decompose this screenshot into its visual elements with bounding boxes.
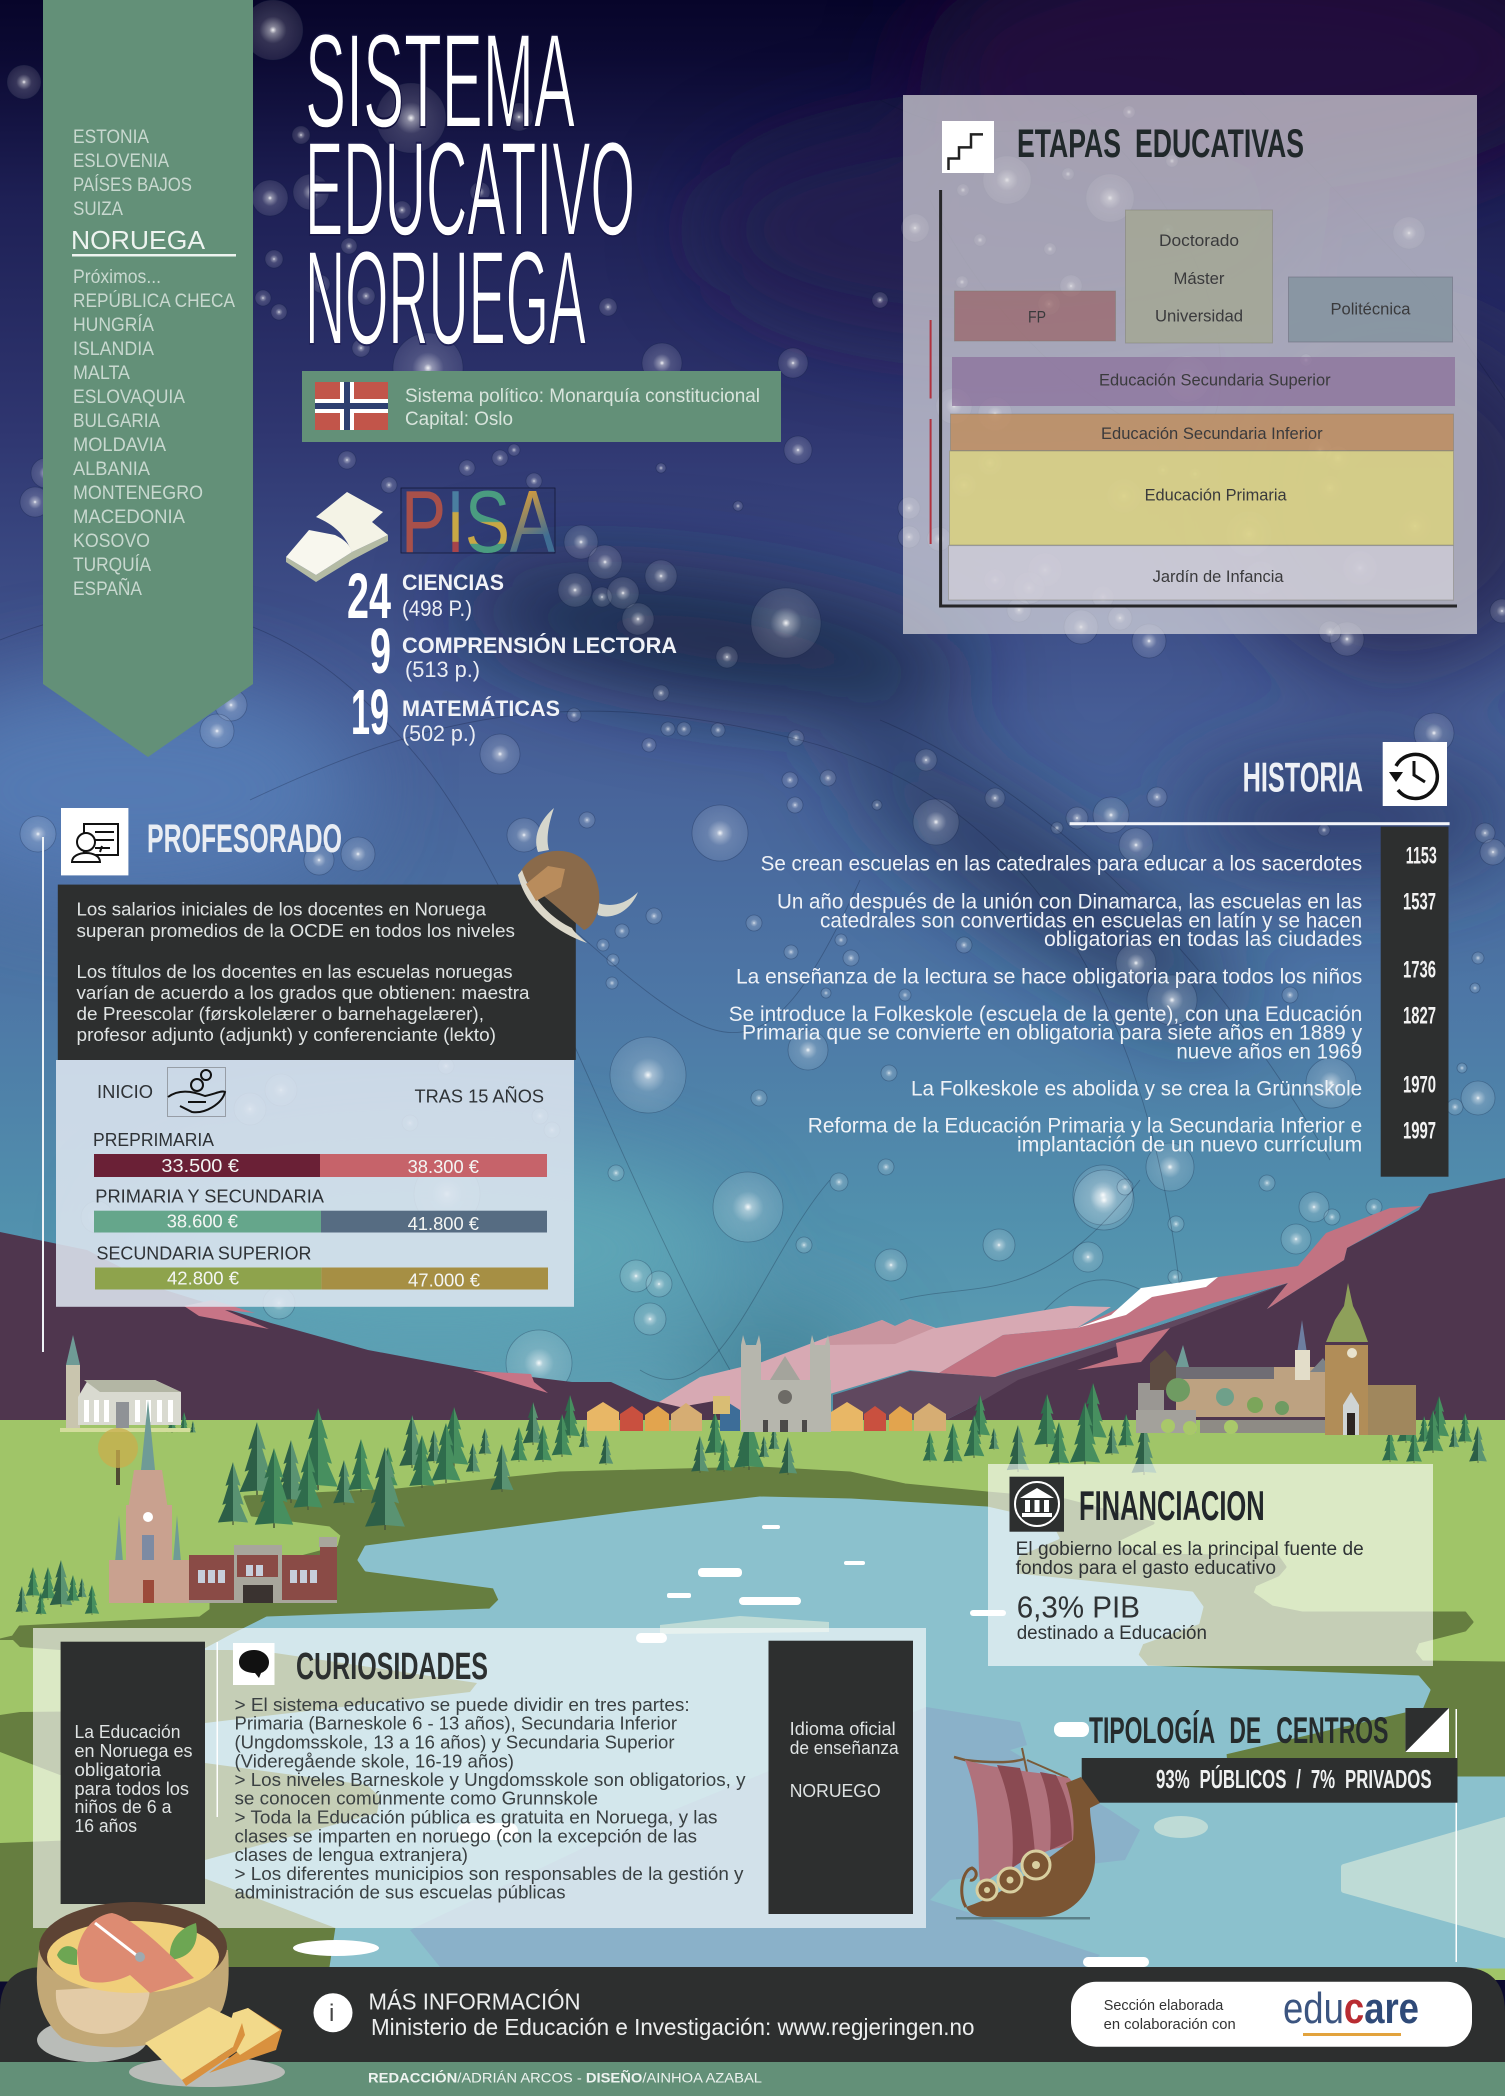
stage chart: Educación Secundaria Inferior	[1101, 424, 1323, 443]
icon: clock with arrow	[1383, 742, 1447, 806]
side ribbon: country list: Próximos...	[73, 267, 161, 288]
side ribbon: country list: SUIZA	[73, 199, 123, 220]
side ribbon: country list: ALBANIA	[73, 459, 150, 480]
icon: norwegian flag	[315, 382, 388, 430]
country info bar: Sistema político: Monarquía constitucional	[405, 386, 760, 407]
side ribbon: country list: KOSOVO	[73, 531, 150, 552]
timeline years	[1403, 842, 1437, 1144]
left callout: obligatoria	[61, 1642, 205, 1904]
side ribbon: country list: MONTENEGRO	[73, 483, 203, 504]
right callout: idioma: Idioma oficial	[790, 1719, 896, 1739]
left callout: obligatoria: en Noruega es	[74, 1741, 192, 1761]
timeline events	[729, 853, 1363, 1157]
stage chart	[930, 190, 1457, 606]
salary bars: 38.300 €	[408, 1156, 480, 1177]
panel: salarios: INICIO	[97, 1081, 153, 1102]
pisa logo: PISA	[401, 472, 555, 571]
curiosidades text: administración de sus escuelas públicas	[234, 1882, 566, 1902]
title: SISTEMA	[305, 7, 575, 156]
timeline events: Reforma de la Educación Primaria y la Secundaria Inferior e	[808, 1115, 1362, 1138]
salary bars: 38.600 €	[167, 1210, 239, 1232]
stage chart: Universidad	[1155, 306, 1243, 326]
side ribbon: country list: REPÚBLICA CHECA	[73, 290, 235, 312]
panel: profesorado text: de Preescolar (førskolelærer o barnehagelærer),	[76, 1004, 484, 1024]
stage chart: Jardín de Infancia	[1153, 567, 1284, 586]
educare credit: en colaboración con	[1104, 2017, 1236, 2033]
educare credit: Sección elaborada	[1104, 1998, 1224, 2014]
historia heading: HISTORIA	[1243, 754, 1363, 801]
timeline events: La Folkeskole es abolida y se crea la Grünnskole	[911, 1078, 1362, 1101]
panel: financiacion: destinado a Educación	[1017, 1623, 1207, 1644]
salary bars: 41.800 €	[408, 1213, 480, 1234]
side ribbon: country list: MALTA	[73, 363, 130, 384]
pisa scores: 19	[351, 676, 389, 748]
right callout: idioma	[768, 1641, 913, 1914]
pisa scores: (498 P.)	[402, 596, 472, 621]
country info bar	[302, 371, 781, 442]
panel: profesorado text: varían de acuerdo a los grados que obtienen: maestra	[76, 983, 531, 1003]
nidaros cathedral	[741, 1335, 831, 1432]
historia heading	[1070, 742, 1450, 825]
side ribbon: country list: PAÍSES BAJOS	[73, 175, 192, 196]
curiosidades text: (Videregående skole, 16-19 años)	[234, 1751, 514, 1771]
side ribbon: country list: ESTONIA	[73, 127, 149, 148]
brick cathedral and palace	[109, 1400, 337, 1603]
left callout: obligatoria: La Educación	[74, 1722, 180, 1742]
timeline events: nueve años en 1969	[1176, 1040, 1362, 1063]
pisa scores: CIENCIAS	[402, 570, 504, 595]
castle and clock tower	[1136, 1283, 1416, 1435]
side ribbon: country list: MOLDAVIA	[73, 435, 166, 456]
panel: financiacion: El gobierno local es la principal fuente de	[1016, 1539, 1364, 1560]
timeline events: Se crean escuelas en las catedrales para educar a los sacerdotes	[761, 853, 1362, 876]
left callout: obligatoria: obligatoria	[74, 1760, 162, 1780]
right callout: idioma: de enseñanza	[790, 1738, 900, 1758]
icon: info: i	[329, 2000, 334, 2027]
pisa scores: 24	[347, 560, 391, 632]
curiosidades text: (Ungdomsskole, 13 a 16 años) y Secundaria Superior	[234, 1733, 674, 1753]
curiosidades text: > Toda la Educación pública es gratuita en Noruega, y las	[234, 1807, 718, 1827]
left white church	[60, 1335, 190, 1432]
infographic canvas: EDUCATIVO	[305, 115, 635, 264]
timeline events: Un año después de la unión con Dinamarca, las escuelas en las	[777, 891, 1362, 914]
panel: salarios	[56, 1060, 574, 1307]
title	[305, 7, 635, 373]
curiosidades text: > Los niveles Barneskole y Ungdomsskole son obligatorios, y	[234, 1770, 746, 1790]
pisa scores: MATEMÁTICAS	[402, 696, 560, 721]
timeline years: 1537	[1403, 888, 1436, 915]
wooden houses	[587, 1396, 946, 1431]
icon: viking ship	[954, 1748, 1100, 1920]
timeline years: 1827	[1403, 1002, 1436, 1029]
mountains	[0, 1178, 1505, 1420]
side ribbon: country list: TURQUÍA	[73, 555, 151, 576]
timeline years: 1153	[1406, 842, 1437, 869]
panel: profesorado text: Los salarios iniciales de los docentes en Noruega	[76, 900, 487, 920]
historia timeline	[729, 827, 1448, 1177]
stage chart: Educación Primaria	[1145, 485, 1287, 504]
icon: hand with coins	[168, 1068, 226, 1116]
panel: etapas educativas	[903, 95, 1477, 634]
pisa scores: (502 p.)	[402, 721, 476, 746]
curiosidades text: > El sistema educativo se puede dividir en tres partes:	[234, 1695, 690, 1715]
salary bars: 47.000 €	[408, 1269, 481, 1290]
trees	[16, 1383, 1487, 1615]
side ribbon: country list	[43, 0, 253, 757]
salary bars	[94, 1154, 548, 1290]
tipologia de centros	[1082, 1708, 1458, 1962]
icon: soup with salmon and bread	[37, 1902, 285, 2087]
footer band	[0, 1967, 1505, 2096]
sky background	[0, 0, 1505, 1430]
panel: financiacion: fondos para el gasto educativo	[1016, 1558, 1276, 1579]
panel: financiacion: FINANCIACION	[1079, 1482, 1265, 1529]
panel: salarios: TRAS 15 AÑOS	[414, 1086, 544, 1106]
panel: salarios: PREPRIMARIA	[93, 1129, 215, 1150]
stage chart: FP	[1028, 308, 1046, 327]
curiosidades text: clases se imparten en noruego (con la excepción de las	[234, 1826, 697, 1846]
icon: info	[314, 1993, 352, 2032]
starfield bubbles	[7, 0, 1505, 1396]
panel: salarios: SECUNDARIA SUPERIOR	[96, 1243, 312, 1264]
profesorado heading: PROFESORADO	[147, 817, 342, 861]
left callout: obligatoria: 16 años	[74, 1816, 137, 1836]
timeline events: La enseñanza de la lectura se hace obligatoria para todos los niños	[736, 965, 1362, 988]
icon: speech bubble	[233, 1643, 274, 1685]
timeline years: 1736	[1403, 956, 1436, 983]
footer band: REDACCIÓN /ADRIÁN ARCOS - DISEÑO/AINHOA AZABAL	[368, 2068, 762, 2085]
icon: bank	[1010, 1477, 1064, 1532]
profesorado heading	[42, 808, 342, 1352]
timeline years: 1997	[1403, 1117, 1436, 1144]
panel: salarios: PRIMARIA Y SECUNDARIA	[95, 1186, 325, 1206]
educare credit: educare	[1283, 1984, 1419, 2033]
panel: profesorado text: profesor adjunto (adjunkt) y conferenciante (lekto)	[76, 1025, 496, 1045]
salary bars: 42.800 €	[167, 1268, 240, 1289]
panel: etapas educativas: ETAPAS EDUCATIVAS	[1017, 122, 1304, 166]
side ribbon: country list: MACEDONIA	[73, 507, 185, 528]
panel: curiosidades	[33, 1628, 926, 1928]
side ribbon: country list: ISLANDIA	[73, 339, 154, 360]
icon: open book	[286, 492, 388, 582]
country info bar: Capital: Oslo	[405, 409, 513, 430]
icon: split square	[1405, 1708, 1449, 1752]
left callout: obligatoria: para todos los	[74, 1779, 189, 1799]
side ribbon: country list: BULGARIA	[73, 411, 160, 432]
side ribbon: country list: ESLOVAQUIA	[73, 387, 185, 408]
icon: viking helmet	[518, 808, 638, 943]
stage chart: Educación Secundaria Superior	[1099, 370, 1331, 390]
timeline years: 1970	[1403, 1071, 1436, 1098]
footer band: Ministerio de Educación e Investigación: www.regjeringen.no	[371, 2014, 974, 2040]
side ribbon: country list: HUNGRÍA	[73, 315, 154, 336]
curiosidades text: se conocen comúnmente como Grunnskole	[234, 1789, 598, 1809]
stage chart: Doctorado	[1159, 231, 1239, 250]
stage chart: Politécnica	[1330, 299, 1411, 318]
infographic canvas: NORUEGA	[305, 224, 586, 373]
deciduous tree	[98, 1428, 138, 1485]
land and water	[0, 1420, 1505, 1980]
side ribbon: country list: ESLOVENIA	[73, 151, 169, 172]
timeline events: Primaria que se convierte en obligatoria para siete años en 1889 y	[742, 1021, 1363, 1044]
pisa scores	[347, 560, 677, 748]
left callout: obligatoria: niños de 6 a	[74, 1797, 172, 1817]
timeline events: Se introduce la Folkeskole (escuela de la gente), con una Educación	[729, 1003, 1362, 1026]
curiosidades text: Primaria (Barneskole 6 - 13 años), Secundaria Inferior	[234, 1714, 677, 1734]
footer band: MÁS INFORMACIÓN	[368, 1988, 580, 2014]
panel: financiacion: 6,3% PIB	[1017, 1589, 1140, 1624]
curiosidades text: > Los diferentes municipios son responsables de la gestión y	[234, 1864, 744, 1884]
salary bars: 33.500 €	[161, 1155, 240, 1176]
side ribbon: country list: ESPAÑA	[73, 578, 142, 600]
right callout: idioma: NORUEGO	[790, 1781, 881, 1801]
timeline events: catedrales son convertidas en escuelas en latín y se hacen	[820, 909, 1362, 932]
curiosidades text: clases de lengua extranjera)	[234, 1845, 468, 1865]
pisa scores: (513 p.)	[405, 657, 480, 682]
panel: financiacion	[988, 1464, 1433, 1666]
pisa scores: 9	[370, 615, 391, 687]
panel: profesorado text	[58, 885, 576, 1060]
side ribbon: country list: NORUEGA	[71, 225, 206, 255]
educare credit	[1071, 1982, 1472, 2047]
icon: stairs	[942, 121, 994, 173]
stage chart: Máster	[1174, 269, 1225, 288]
curiosidades text	[234, 1695, 746, 1902]
pisa scores: COMPRENSIÓN LECTORA	[402, 633, 677, 658]
timeline events: implantación de un nuevo currículum	[1017, 1134, 1362, 1157]
panel: curiosidades: CURIOSIDADES	[296, 1646, 488, 1688]
icon: teacher at board	[61, 808, 128, 875]
panel: profesorado text: Los títulos de los docentes en las escuelas noruegas	[76, 962, 512, 982]
timeline events: obligatorias en todas las ciudades	[1044, 928, 1362, 951]
panel: profesorado text: superan promedios de la OCDE en todos los niveles	[76, 921, 515, 941]
